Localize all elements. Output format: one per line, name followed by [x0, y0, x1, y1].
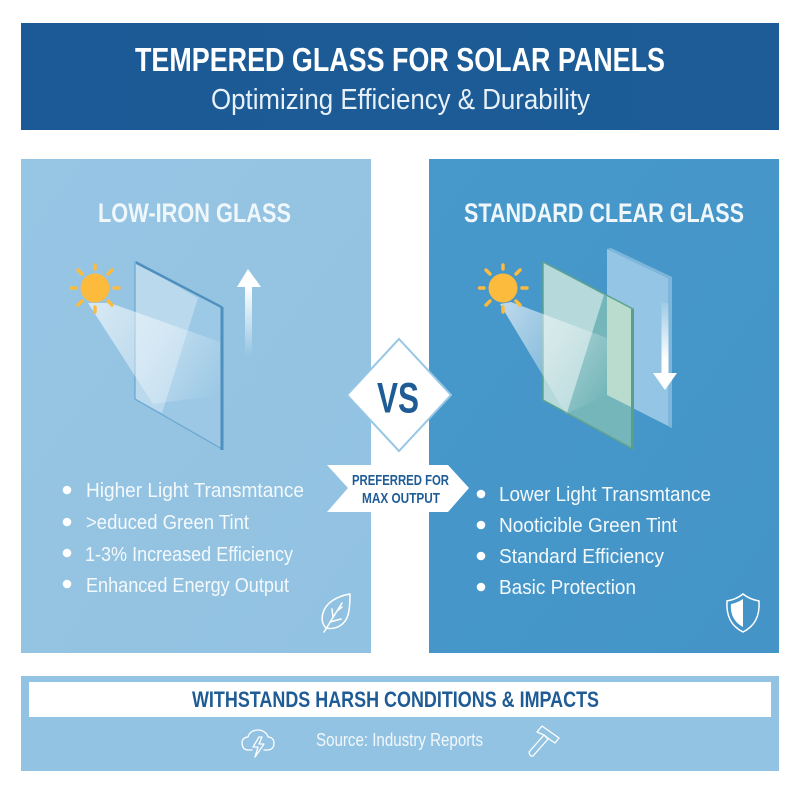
source note: Source: Industry Reports: [316, 730, 483, 750]
title: TEMPERED GLASS FOR SOLAR PANELS: [135, 42, 665, 79]
heading: low-iron glass: LOW-IRON GLASS: [98, 198, 291, 228]
list: standard glass properties: Standard Efficiency: [499, 545, 665, 568]
list: standard glass properties: [477, 483, 711, 599]
icon: storm cloud: [242, 730, 274, 757]
ribbon: preferred for max output: MAX OUTPUT: [362, 490, 440, 507]
list: low-iron benefits: Higher Light Transmtance: [86, 479, 304, 502]
illustration: green-tinted glass pane: [543, 262, 634, 449]
panel: low-iron glass: [21, 159, 371, 653]
ribbon: preferred for max output: [327, 465, 469, 512]
list: low-iron benefits: 1-3% Increased Efficiency: [85, 543, 294, 566]
subtitle: Optimizing Efficiency & Durability: [211, 84, 590, 116]
list: low-iron benefits: [63, 479, 304, 597]
list: low-iron benefits: Enhanced Energy Output: [86, 574, 289, 597]
ribbon: preferred for max output: PREFERRED FOR: [352, 472, 449, 489]
icon: hammer: [529, 726, 559, 756]
badge: VS: [347, 339, 451, 451]
icon: sun: [480, 265, 527, 312]
list: standard glass properties: Nooticible Green Tint: [499, 514, 677, 537]
list: standard glass properties: Basic Protection: [499, 576, 636, 599]
illustration: light beam: [500, 302, 607, 414]
arrow: down: [653, 303, 677, 390]
illustration: clear glass pane: [135, 261, 224, 450]
header banner: [21, 23, 779, 130]
icon: shield: [727, 594, 759, 632]
footer band: [21, 676, 779, 771]
badge: VS: VS: [377, 374, 419, 422]
arrow: up: [237, 269, 261, 356]
footer heading: WITHSTANDS HARSH CONDITIONS & IMPACTS: [192, 687, 599, 712]
illustration: light beam: [88, 303, 220, 404]
panel: standard clear glass: [429, 159, 779, 653]
illustration: back glass pane: [607, 248, 672, 428]
icon: leaf: [322, 594, 350, 632]
icon: sun: [72, 265, 119, 312]
list: standard glass properties: Lower Light Transmtance: [499, 483, 711, 506]
list: low-iron benefits: >educed Green Tint: [86, 511, 249, 534]
